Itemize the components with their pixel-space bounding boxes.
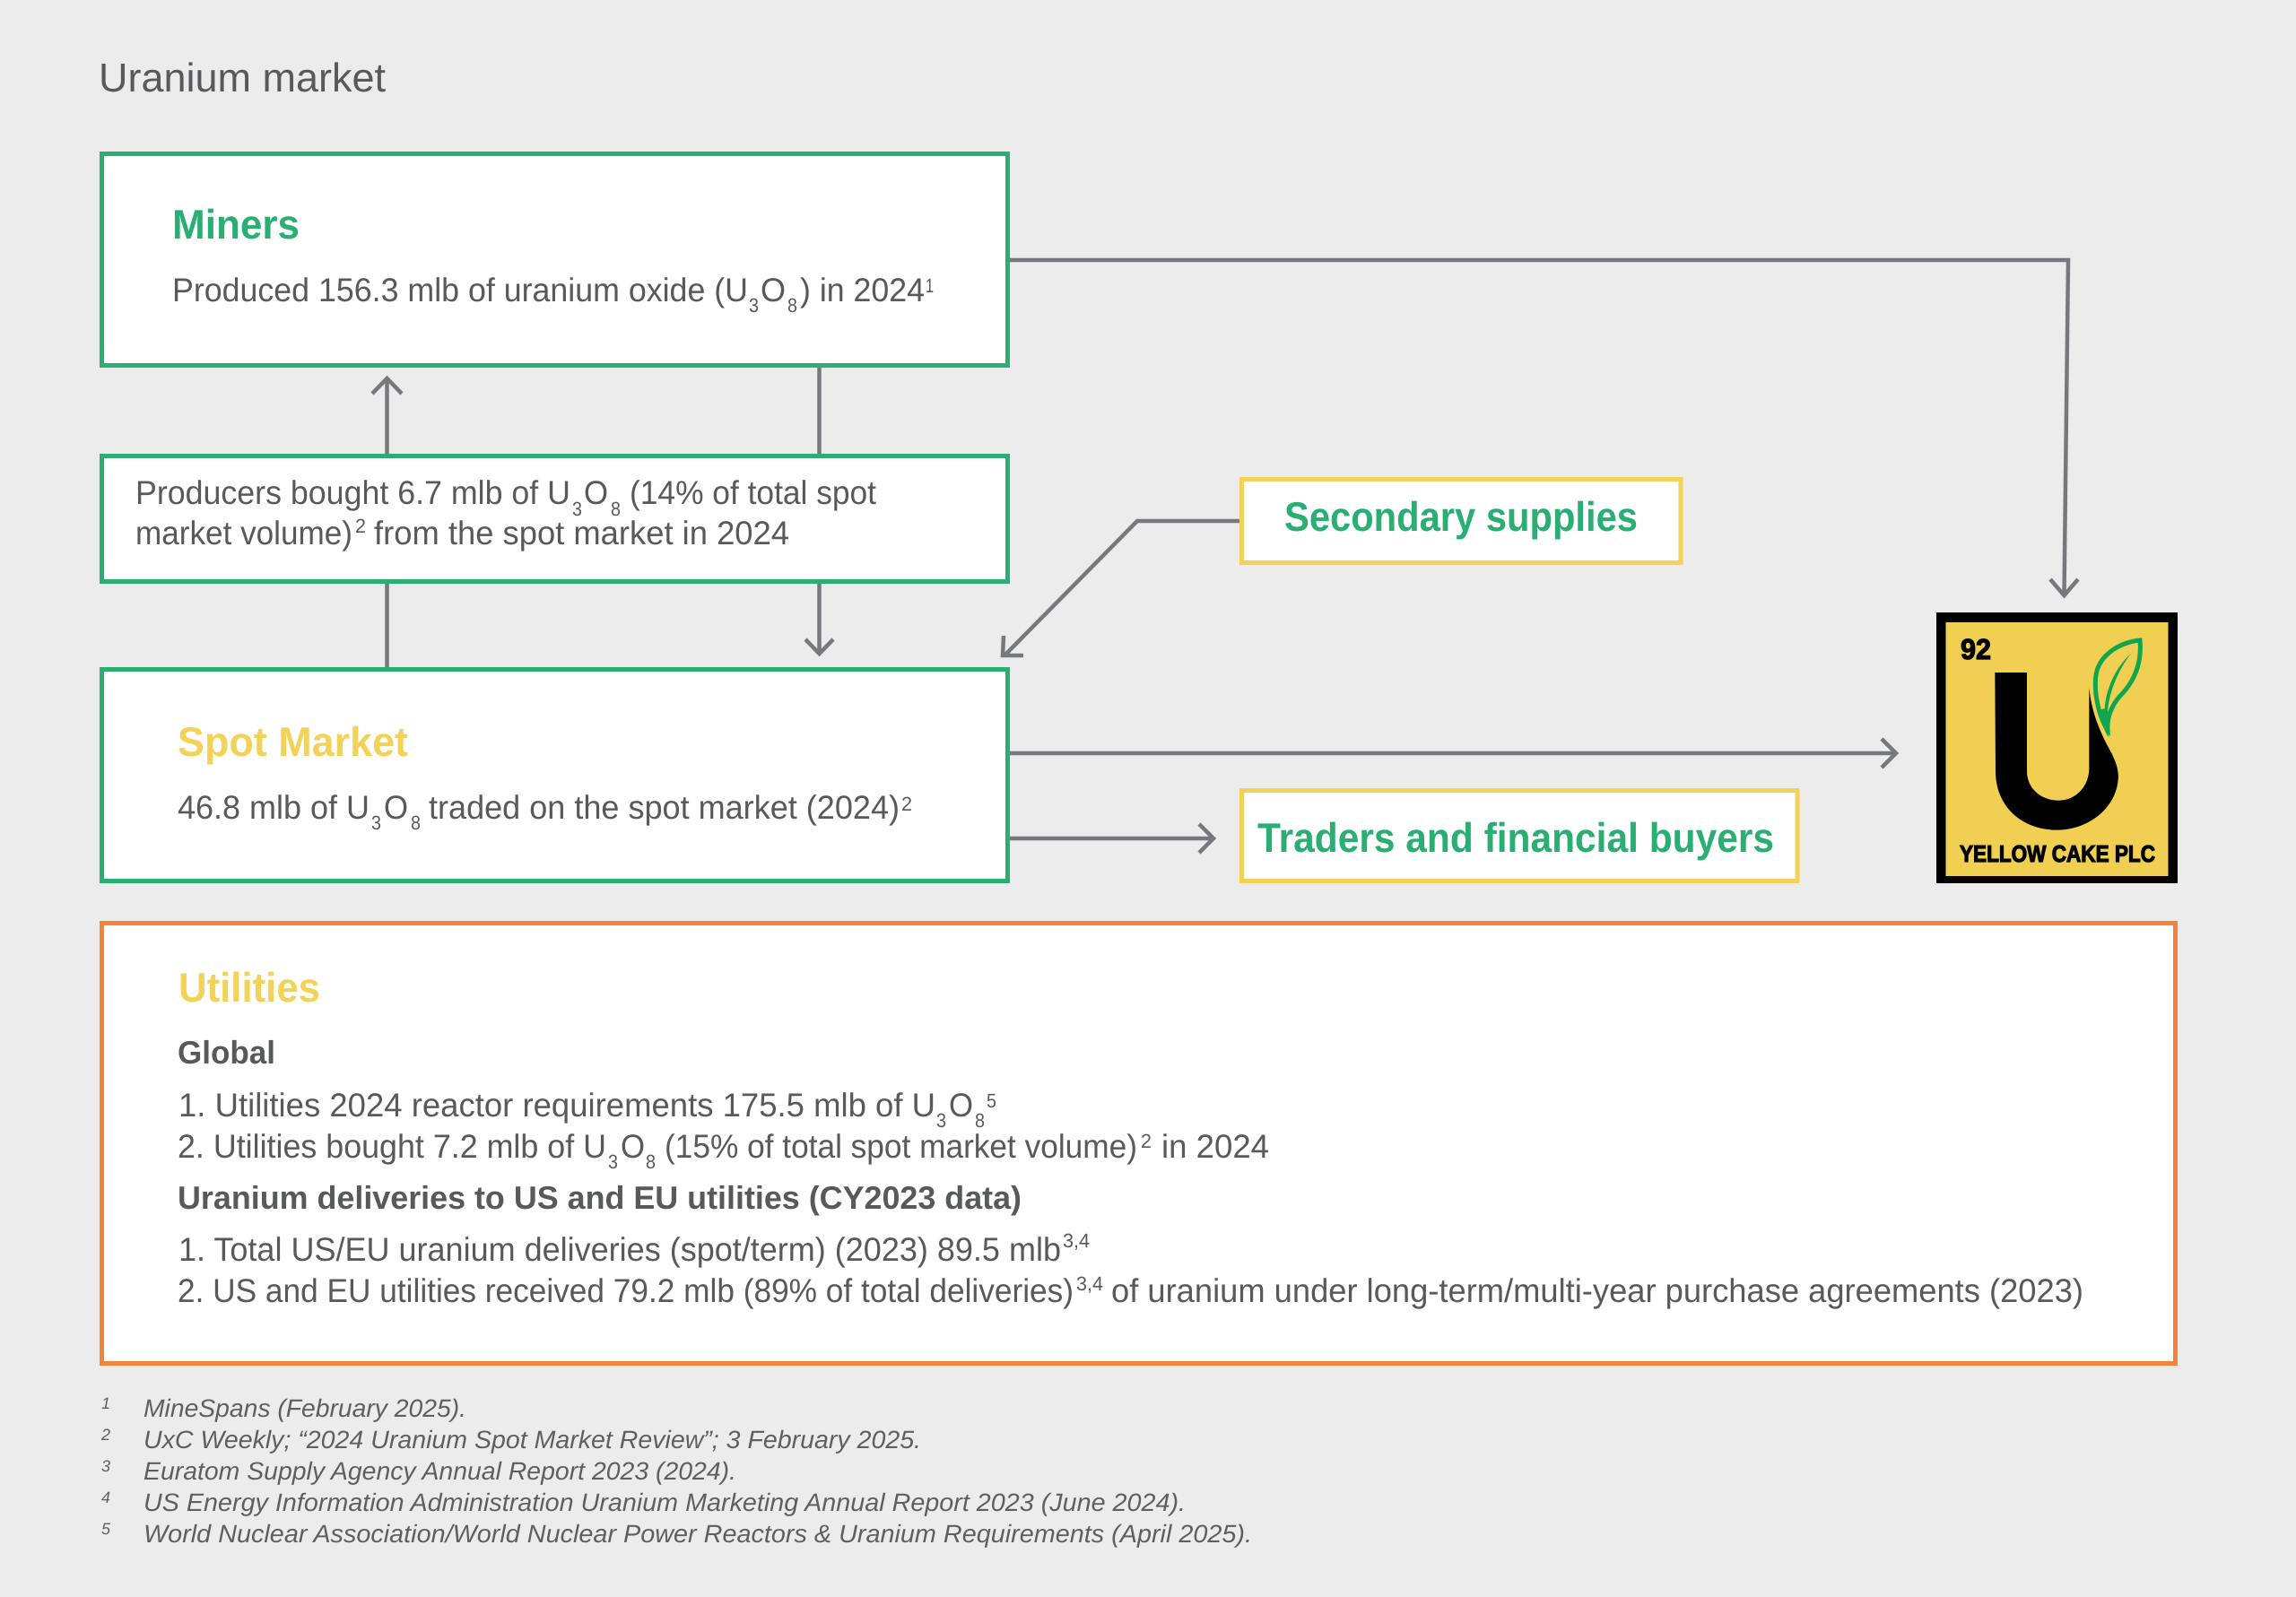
- arrow: spot market purchase up to miners: [372, 378, 402, 454]
- panel: utilities: [102, 924, 2176, 1363]
- text: global list: 8: [646, 1150, 656, 1173]
- arrow: spot market to traders: [1009, 824, 1213, 853]
- heading: miners: Miners: [172, 201, 300, 247]
- footnotes: 4: [101, 1489, 110, 1506]
- logo leaf: [2095, 640, 2140, 738]
- arrow: spot market to Yellow Cake: [1009, 739, 1896, 768]
- subheading: global: Global: [178, 1034, 275, 1071]
- text: producers bought: [135, 474, 877, 551]
- text: spot market volume: 2: [901, 793, 912, 815]
- arrow: secondary supplies to spot market: [1003, 521, 1240, 655]
- text: global list: 8: [975, 1109, 985, 1132]
- panel: miners: [102, 154, 1008, 366]
- text: global list: (15% of total spot market volume): [665, 1128, 1137, 1165]
- logo wordmark: YELLOW CAKE PLC: [1960, 840, 2155, 867]
- footnotes: MineSpans (February 2025).: [144, 1394, 466, 1422]
- text: miners production: Produced 156.3 mlb of uranium oxide (U: [172, 272, 748, 308]
- logo letter U: [1995, 673, 2118, 830]
- text: global list: 3: [936, 1109, 946, 1132]
- text: global list: O: [621, 1128, 645, 1165]
- text: deliveries list: 2. US and EU utilities received 79.2 mlb (89% of total deliveries): [178, 1272, 1074, 1309]
- panel: secondary supplies: Secondary supplies: [1284, 493, 1638, 540]
- text: spot market volume: 8: [411, 812, 421, 834]
- text: deliveries list: 3,4: [1063, 1229, 1090, 1252]
- text: global list: O: [949, 1087, 973, 1124]
- heading: utilities: Utilities: [178, 964, 320, 1011]
- text: miners production: 3: [749, 294, 759, 317]
- footnotes: 5: [101, 1520, 111, 1538]
- arrow: producers box down to spot market: [805, 584, 833, 654]
- footnotes: US Energy Information Administration Uranium Marketing Annual Report 2023 (June 2024).: [144, 1489, 1186, 1516]
- text: global list: 1. Utilities 2024 reactor requirements 175.5 mlb of U: [178, 1087, 935, 1124]
- subheading: uranium deliveries: Uranium deliveries to US and EU utilities (CY2023 data): [178, 1179, 1022, 1216]
- connector: producers box to spot market: [385, 584, 389, 667]
- connector: miners to producers box: [817, 368, 822, 454]
- text: spot market volume: O: [384, 789, 408, 826]
- logo number: 92: [1961, 633, 1991, 665]
- text: global list: 2. Utilities bought 7.2 mlb of U: [178, 1128, 606, 1165]
- heading: spot market: Spot Market: [178, 718, 408, 765]
- footnotes: 2: [100, 1426, 110, 1444]
- panel: traders and financial buyers: [1241, 791, 1797, 881]
- text: producers bought: 2: [355, 515, 366, 537]
- text: deliveries list: 3,4: [1076, 1272, 1103, 1295]
- text: global list: 3: [608, 1150, 618, 1173]
- text: spot market volume: [178, 789, 912, 834]
- text: global list: 5: [987, 1089, 996, 1112]
- text: miners production: O: [761, 272, 786, 308]
- text: producers bought: Producers bought 6.7 mlb of U: [135, 474, 570, 511]
- panel: secondary supplies: [1241, 479, 1681, 563]
- text: spot market volume: 46.8 mlb of U: [178, 789, 370, 826]
- text: global list: in 2024: [1161, 1128, 1269, 1165]
- text: miners production: ) in 2024: [800, 272, 925, 308]
- footnotes: 1: [101, 1394, 110, 1412]
- panel: spot market: [102, 669, 1008, 881]
- panel: producers bought: [102, 456, 1008, 581]
- text: global list: 2: [1141, 1130, 1152, 1152]
- footnotes: 3: [101, 1457, 110, 1475]
- text: producers bought: 3: [572, 498, 582, 520]
- panel: traders and financial buyers: Traders and financial buyers: [1257, 814, 1774, 861]
- text: miners production: [172, 272, 934, 317]
- text: deliveries list: of uranium under long-term/multi-year purchase agreements (2023): [1111, 1272, 2083, 1309]
- text: global list: [178, 1087, 1269, 1173]
- text: spot market volume: traded on the spot market (2024): [429, 789, 900, 826]
- text: deliveries list: [178, 1229, 2083, 1309]
- text: producers bought: from the spot market in 2024: [374, 515, 789, 551]
- icon: Yellow Cake logo: [1936, 612, 2178, 883]
- text: spot market volume: 3: [371, 812, 381, 834]
- footnotes: [100, 1394, 1252, 1548]
- arrow: miners to Yellow Cake: [1009, 260, 2078, 595]
- title: Uranium market: [99, 55, 386, 100]
- text: producers bought: 8: [611, 498, 621, 520]
- text: producers bought: market volume): [135, 515, 352, 551]
- footnotes: Euratom Supply Agency Annual Report 2023 (2024).: [144, 1457, 736, 1485]
- footnotes: World Nuclear Association/World Nuclear Power Reactors & Uranium Requirements (April 2025).: [144, 1520, 1252, 1548]
- text: miners production: 1: [926, 274, 934, 297]
- text: deliveries list: 1. Total US/EU uranium deliveries (spot/term) (2023) 89.5 mlb: [178, 1231, 1061, 1268]
- footnotes: UxC Weekly; “2024 Uranium Spot Market Review”; 3 February 2025.: [144, 1426, 921, 1454]
- text: miners production: 8: [787, 294, 797, 317]
- text: producers bought: O: [584, 474, 608, 511]
- text: producers bought: (14% of total spot: [630, 474, 877, 511]
